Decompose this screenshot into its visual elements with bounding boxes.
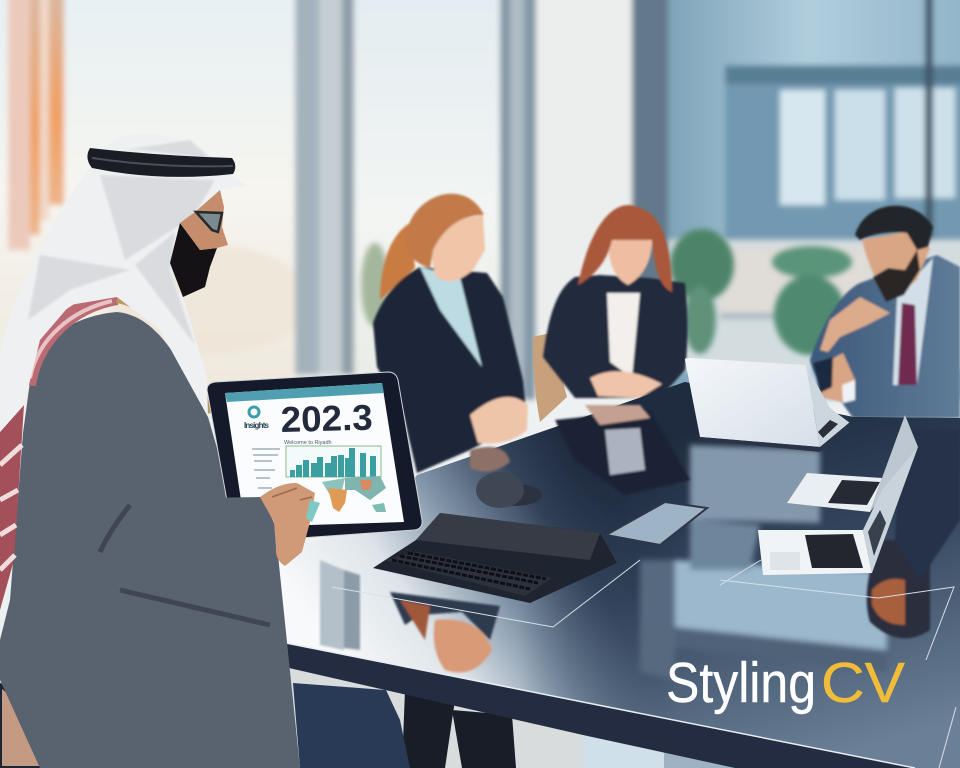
highlight lines <box>332 560 956 768</box>
headscarf shading <box>28 140 215 345</box>
chair behind centre woman <box>533 333 567 422</box>
raised hand <box>820 297 890 352</box>
reflection: man <box>867 430 960 638</box>
lower hand <box>817 353 855 402</box>
plants <box>361 229 852 355</box>
glasses <box>196 212 222 232</box>
robe <box>0 312 300 768</box>
scarf stripes <box>0 405 24 610</box>
sleeve over tablet <box>100 497 285 640</box>
front edge <box>286 643 915 768</box>
face <box>180 190 228 250</box>
ponytail <box>380 223 415 300</box>
blazer <box>373 267 527 473</box>
reflection: woman <box>390 592 500 672</box>
logo: StylingCV: Styling <box>666 651 816 715</box>
woman in centre <box>543 205 688 398</box>
man on right <box>810 206 960 418</box>
face <box>425 215 485 281</box>
hands <box>470 397 528 443</box>
reflection: back women <box>470 405 690 495</box>
beard <box>873 250 920 302</box>
chair <box>0 685 50 768</box>
tablet brand text: Insights <box>244 421 270 430</box>
face <box>862 232 930 300</box>
tablet year text: 202.3 <box>280 397 373 440</box>
phone on table <box>606 502 707 545</box>
trousers <box>293 683 410 768</box>
tablet sidebar lines <box>252 449 280 488</box>
agal <box>87 148 235 177</box>
headscarf <box>0 134 247 432</box>
woman legs <box>402 690 516 768</box>
phone <box>813 357 833 393</box>
gold trim <box>117 299 210 413</box>
blazer <box>543 275 688 398</box>
reflection: column <box>320 560 360 650</box>
blouse <box>420 267 482 367</box>
tablet world map <box>322 476 386 512</box>
table <box>275 382 960 768</box>
tablet caption text: Welcome to Riyadh <box>284 440 332 446</box>
suit <box>810 255 960 418</box>
tablet brand icon <box>249 407 259 417</box>
tablet screen <box>225 383 404 527</box>
tie <box>898 303 917 385</box>
tablet header <box>225 383 384 402</box>
teal stylus <box>306 500 320 522</box>
cuff <box>842 380 855 403</box>
lower right laptop <box>758 447 918 575</box>
floor and legs <box>285 650 960 768</box>
beard <box>170 223 217 297</box>
robe folds <box>100 505 270 625</box>
tablet <box>207 372 422 542</box>
hand holding tablet <box>260 483 320 566</box>
back laptop <box>685 358 851 452</box>
hair <box>405 194 484 268</box>
keyboard stand <box>373 513 617 603</box>
logo: StylingCV: CV <box>821 651 905 715</box>
tablet bar chart <box>286 446 381 477</box>
reflection: window <box>640 445 887 680</box>
hands <box>590 371 662 398</box>
shirt <box>893 258 933 385</box>
right table surface <box>532 382 960 768</box>
computer mouse <box>476 472 542 508</box>
hair <box>855 206 933 250</box>
man with tablet <box>0 134 410 768</box>
hair <box>578 205 672 292</box>
shoulder stripes <box>28 297 117 385</box>
face <box>608 230 652 285</box>
upper right laptop <box>787 415 918 512</box>
table top <box>275 382 960 768</box>
blouse <box>607 293 640 378</box>
woman with ponytail <box>373 194 528 473</box>
